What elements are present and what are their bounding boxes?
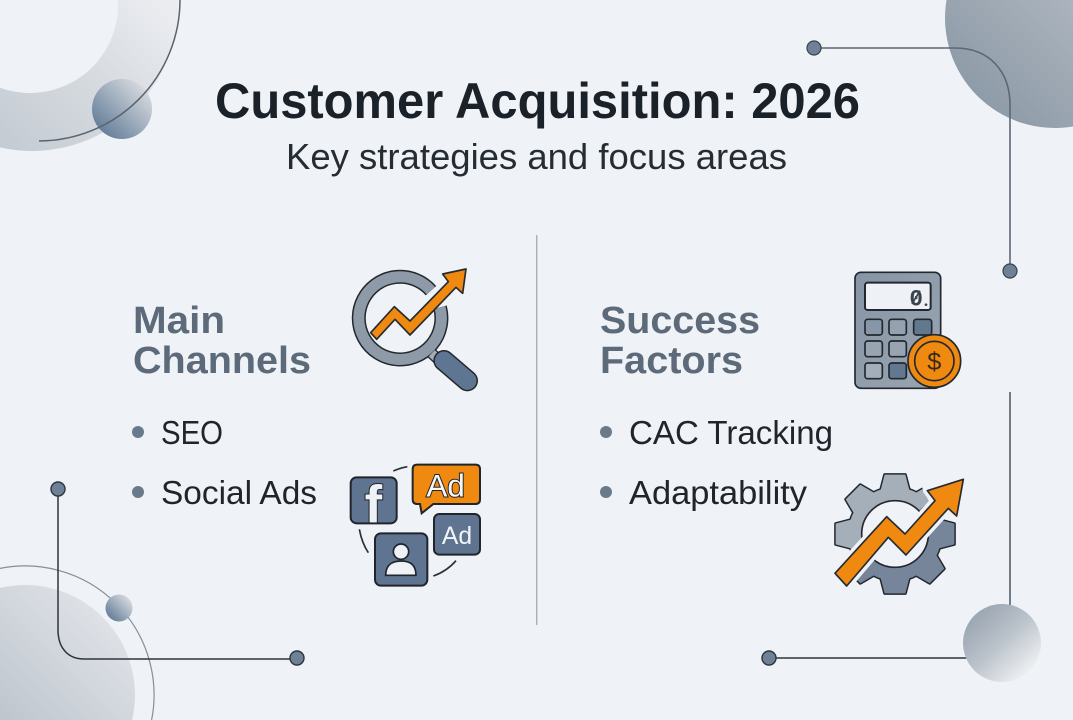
- icon: calculator with dollar coin: 0: [909, 286, 923, 312]
- center divider: [536, 235, 537, 625]
- decoration: bottom-right circle and connector: [762, 392, 1041, 682]
- decoration: top-left circles: [0, 0, 180, 151]
- icon: calculator with dollar coin: $: [927, 348, 941, 376]
- decoration: bottom-left circles and connector: [0, 482, 304, 720]
- icon: calculator with dollar coin: [855, 272, 961, 388]
- panel: success factors: [600, 272, 965, 593]
- panel: main channels: [132, 269, 480, 586]
- icon: social ads cluster: [351, 465, 480, 586]
- list item: SEO: [132, 414, 223, 451]
- list item: Adaptability: Adaptability: [629, 474, 808, 511]
- heading: main channels: [133, 300, 311, 382]
- icon: magnifying glass with growth arrow: [359, 269, 467, 381]
- list item: Social Ads: Social Ads: [161, 474, 317, 511]
- icon: social ads cluster: f: [365, 475, 383, 534]
- heading: main channels: Main: [133, 300, 225, 342]
- decoration: top-right circle and connector: [807, 0, 1073, 278]
- icon: social ads cluster: Ad: [442, 523, 472, 550]
- icon: social ads cluster: Ad: [427, 469, 465, 504]
- subtitle: Key strategies and focus areas: [286, 136, 787, 177]
- title: Customer Acquisition: 2026: [215, 73, 860, 129]
- list item: CAC Tracking: CAC Tracking: [629, 414, 833, 451]
- list item: SEO: SEO: [161, 414, 223, 451]
- heading: success factors: Factors: [600, 340, 743, 382]
- heading: success factors: Success: [600, 300, 760, 342]
- heading: main channels: Channels: [133, 340, 311, 382]
- heading: success factors: [600, 300, 760, 382]
- icon: gear with growth arrow: [835, 473, 965, 593]
